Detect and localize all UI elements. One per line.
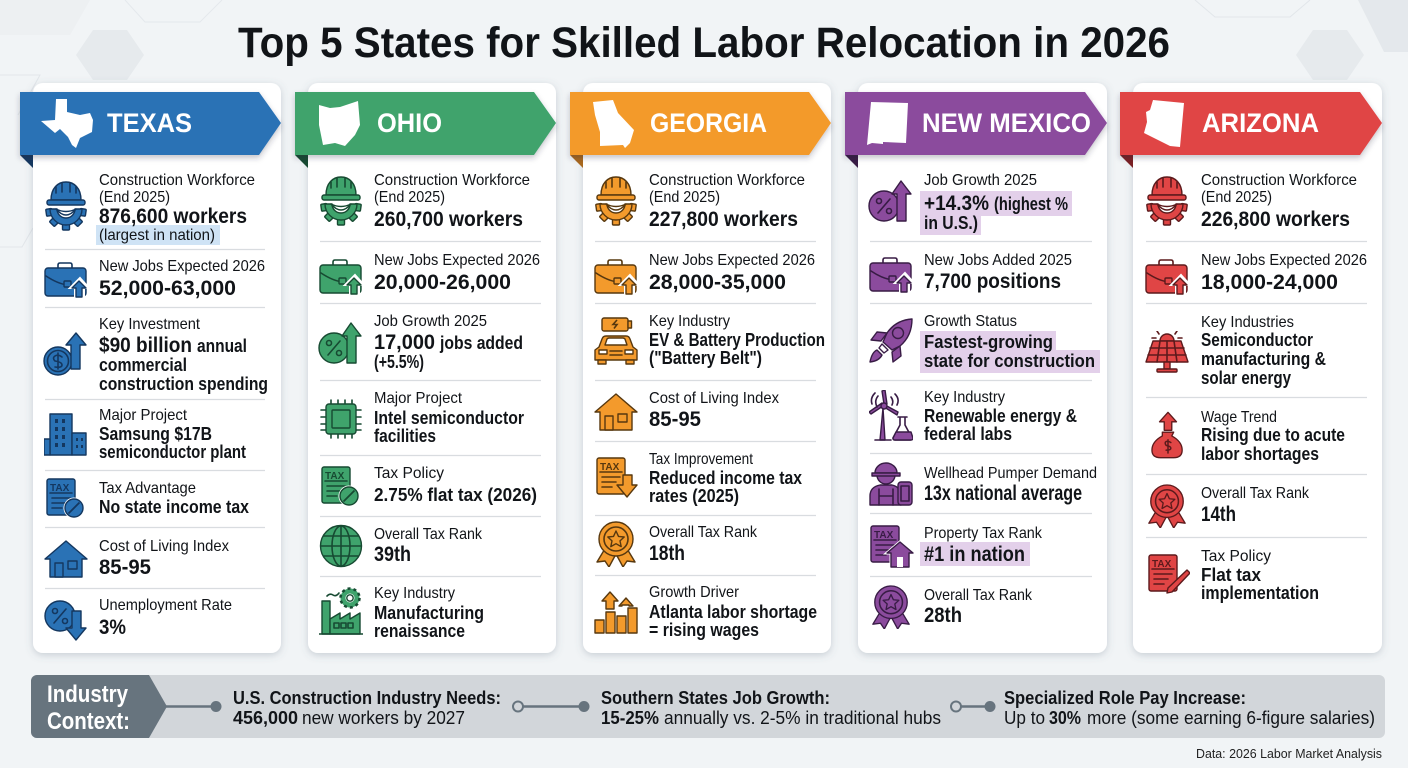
- icon: briefcase: [320, 260, 364, 295]
- row: tax policy: Tax Policy: [1201, 548, 1271, 565]
- icon: electric car and battery: [595, 318, 637, 364]
- connector 3: [951, 701, 996, 712]
- ribbon: Georgia: [570, 92, 831, 168]
- row: construction workforce: [596, 172, 805, 231]
- row: new jobs: [870, 252, 1072, 293]
- row: new jobs: [1146, 252, 1367, 295]
- row: wage trend: [1152, 409, 1345, 464]
- icon: percent with down arrow: [45, 601, 86, 640]
- row: tax improvement: [597, 451, 803, 506]
- row: growth driver: [595, 584, 817, 640]
- row: tax advantage: [47, 479, 250, 518]
- fact: construction needs: [233, 687, 501, 728]
- source note: Data: 2026 Labor Market Analysis: [1196, 746, 1382, 761]
- row: tax policy: [322, 465, 537, 506]
- row: key industries: Key Industries: [1201, 314, 1294, 331]
- fact: southern growth: Southern States Job Growth:: [601, 687, 830, 708]
- row: new jobs: New Jobs Added 2025: [924, 252, 1072, 269]
- panel: Texas: [20, 83, 281, 653]
- row: key industry: federal labs: [924, 423, 1012, 444]
- row: job growth: +14.3%: [924, 191, 989, 215]
- icon: percent with up arrow: [319, 323, 361, 363]
- row: key investment: Key Investment: [99, 316, 201, 333]
- icon: tax document with percent circle: [322, 467, 360, 506]
- icon: hard hat and gear: [596, 177, 636, 225]
- row: key industry: Key Industry: [374, 585, 455, 602]
- ribbon: Arizona: [1120, 92, 1382, 168]
- ribbon: Texas: [20, 92, 281, 168]
- fact: southern growth: annually vs. 2-5% in traditional hubs: [664, 707, 941, 728]
- row: major project: Intel semiconductor: [374, 407, 524, 428]
- row: cost of living: Cost of Living Index: [99, 538, 229, 555]
- row: new jobs: [595, 252, 815, 295]
- icon: dollar coin with arrow: [44, 333, 86, 375]
- row: unemployment: [45, 597, 232, 640]
- row: wage trend: labor shortages: [1201, 443, 1319, 464]
- row: major project: Samsung $17B: [99, 423, 212, 444]
- ribbon: Georgia: GEORGIA: [650, 108, 767, 138]
- row: tax policy: implementation: [1201, 582, 1319, 603]
- row: unemployment: 3%: [99, 615, 126, 639]
- row: tax policy: Tax Policy: [374, 465, 444, 482]
- row: new jobs: 7,700 positions: [924, 269, 1061, 293]
- row: job growth: (+5.5%): [374, 351, 424, 372]
- row: new jobs: [45, 258, 265, 300]
- row: construction workforce: Construction Workforce: [649, 172, 805, 189]
- icon: tax document with percent circle: TAX: [325, 471, 345, 482]
- row: cost of living: 85-95: [99, 555, 151, 579]
- row: construction workforce: [321, 172, 530, 231]
- row: construction workforce: Construction Workforce: [374, 172, 530, 189]
- row: wage trend: Rising due to acute: [1201, 424, 1345, 445]
- panel: Ohio: [295, 83, 556, 653]
- row: major project: Major Project: [99, 407, 188, 424]
- row: key investment: commercial: [99, 354, 187, 375]
- row: construction workforce: [46, 172, 255, 245]
- row: cost of living: [595, 390, 779, 431]
- row: job growth: [319, 313, 523, 372]
- ribbon: New Mexico: NEW MEXICO: [922, 108, 1091, 138]
- row: job growth: 17,000: [374, 330, 435, 354]
- ribbon: New Mexico: [845, 92, 1107, 168]
- row: new jobs: 52,000-63,000: [99, 276, 236, 300]
- icon: bars with arrows: [595, 592, 637, 633]
- fact: specialized pay: [1004, 687, 1375, 728]
- row: key industry: [319, 585, 484, 641]
- row: construction workforce: 876,600 workers: [99, 204, 247, 228]
- row: key industries: [1146, 314, 1326, 388]
- icon: tax document with no sign: TAX: [50, 483, 70, 494]
- footer bar: industry context: [31, 675, 1385, 738]
- row: major project: semiconductor plant: [99, 441, 246, 462]
- row: key industry: ("Battery Belt"): [649, 347, 762, 368]
- row: overall tax rank: [320, 526, 483, 566]
- ribbon: Ohio: OHIO: [377, 108, 442, 138]
- icon: house: [595, 394, 637, 430]
- icon: briefcase: [45, 263, 89, 298]
- row: growth status: state for construction: [924, 350, 1095, 371]
- icon: briefcase: [1146, 260, 1190, 295]
- row: key industry: renaissance: [374, 620, 465, 641]
- connector 1: [166, 701, 222, 712]
- row: key investment: [44, 316, 268, 394]
- row: property tax rank: [871, 525, 1043, 567]
- row: job growth: Job Growth 2025: [374, 313, 487, 330]
- row: tax policy: 2.75% flat tax (2026): [374, 484, 537, 505]
- icon: tax document with down arrow: [597, 458, 637, 497]
- row: construction workforce: (End 2025): [1201, 189, 1272, 206]
- row: key industry: EV & Battery Production: [649, 329, 825, 350]
- fact: specialized pay: more (some earning 6-figure salaries): [1087, 707, 1375, 728]
- row: wellhead pumper: 13x national average: [924, 481, 1082, 505]
- row: overall tax rank: 39th: [374, 542, 411, 566]
- row: growth driver: Growth Driver: [649, 584, 740, 601]
- row: key industry: Key Industry: [924, 389, 1005, 406]
- row: new jobs: [320, 252, 540, 295]
- row: tax improvement: Reduced income tax: [649, 467, 803, 488]
- ribbon: Arizona: ARIZONA: [1202, 108, 1319, 138]
- icon: briefcase: [595, 260, 639, 295]
- row: wage trend: Wage Trend: [1201, 409, 1277, 426]
- row: key investment: annual: [197, 335, 247, 356]
- row: key investment: construction spending: [99, 373, 268, 394]
- icon: medal: [597, 522, 635, 567]
- footer label: Context:: [47, 708, 130, 735]
- row: new jobs: New Jobs Expected 2026: [649, 252, 815, 269]
- icon: tax document with down arrow: TAX: [600, 462, 620, 473]
- icon: office buildings: [44, 414, 86, 455]
- fact: construction needs: U.S. Construction Industry Needs:: [233, 687, 501, 708]
- icon: tax document with no sign: [47, 479, 84, 518]
- icon: tax document with house: [871, 526, 913, 567]
- row: major project: [321, 390, 524, 446]
- row: tax improvement: rates (2025): [649, 485, 739, 506]
- connector 2: [513, 701, 590, 712]
- background hexagon pattern: [0, 0, 1408, 247]
- icon: money bag with arrow: [1152, 412, 1182, 458]
- row: new jobs: New Jobs Expected 2026: [374, 252, 540, 269]
- icon: percent with up arrow: [869, 181, 911, 221]
- icon: medal: [1149, 485, 1185, 528]
- row: construction workforce: (End 2025): [374, 189, 445, 206]
- row: growth driver: Atlanta labor shortage: [649, 601, 817, 622]
- row: property tax rank: #1 in nation: [924, 542, 1025, 566]
- row: construction workforce: 260,700 workers: [374, 207, 523, 231]
- icon: hard hat and gear: [46, 182, 86, 230]
- icon: solar panel and sun: [1146, 327, 1188, 372]
- row: tax advantage: No state income tax: [99, 496, 250, 517]
- row: new jobs: 18,000-24,000: [1201, 270, 1338, 294]
- panel: Georgia: [570, 83, 831, 653]
- row: construction workforce: 226,800 workers: [1201, 207, 1350, 231]
- row: construction workforce: [1147, 172, 1357, 231]
- fact: construction needs: 456,000: [233, 707, 298, 728]
- row: cost of living: 85-95: [649, 407, 701, 431]
- row: new jobs: 20,000-26,000: [374, 270, 511, 294]
- icon: hard hat and gear: [321, 177, 361, 225]
- row: job growth: (highest %: [994, 193, 1068, 214]
- title: Top 5 States for Skilled Labor Relocation in 2026: [238, 19, 1170, 67]
- row: major project: Major Project: [374, 390, 463, 407]
- row: construction workforce: 227,800 workers: [649, 207, 798, 231]
- row: overall tax rank: Overall Tax Rank: [374, 526, 483, 543]
- icon: hard hat and gear: [1147, 177, 1187, 225]
- row: overall tax rank: [597, 522, 758, 567]
- row: construction workforce: Construction Workforce: [1201, 172, 1357, 189]
- row: construction workforce: (End 2025): [99, 189, 170, 206]
- fact: specialized pay: Specialized Role Pay Increase:: [1004, 687, 1246, 708]
- row: key industry: [595, 313, 825, 368]
- row: new jobs: New Jobs Expected 2026: [99, 258, 265, 275]
- icon: house: [45, 541, 87, 577]
- row: property tax rank: Property Tax Rank: [924, 525, 1043, 542]
- icon: tax document with pen: TAX: [1152, 559, 1172, 570]
- row: key industries: solar energy: [1201, 367, 1292, 388]
- row: key industries: Semiconductor: [1201, 329, 1313, 350]
- row: job growth: in U.S.): [924, 212, 978, 233]
- fact: specialized pay: Up to: [1004, 707, 1045, 728]
- row: construction workforce: (End 2025): [649, 189, 720, 206]
- row: tax advantage: Tax Advantage: [99, 480, 196, 497]
- row: growth driver: = rising wages: [649, 619, 759, 640]
- row: tax improvement: Tax Improvement: [649, 451, 753, 468]
- row: wellhead pumper: Wellhead Pumper Demand: [924, 465, 1097, 482]
- icon: tax document with house: TAX: [874, 530, 894, 541]
- row: wellhead pumper: [870, 463, 1097, 505]
- fact: specialized pay: 30%: [1049, 707, 1081, 728]
- row: growth status: Fastest-growing: [924, 331, 1053, 352]
- fact: southern growth: 15-25%: [601, 707, 659, 728]
- row: growth status: [870, 313, 1100, 373]
- icon: medal: [873, 586, 909, 629]
- icon: briefcase: [870, 258, 914, 293]
- row: overall tax rank: [873, 586, 1033, 629]
- icon: wind turbine and flask: [869, 390, 913, 440]
- row: new jobs: 28,000-35,000: [649, 270, 786, 294]
- row: growth status: Growth Status: [924, 313, 1017, 330]
- row: overall tax rank: [1149, 485, 1310, 528]
- row: major project: facilities: [374, 425, 436, 446]
- row: key industry: Manufacturing: [374, 602, 484, 623]
- row: unemployment: Unemployment Rate: [99, 597, 232, 614]
- row: tax policy: Flat tax: [1201, 564, 1262, 585]
- fact: construction needs: new workers by 2027: [302, 707, 465, 728]
- row: key industry: Key Industry: [649, 313, 730, 330]
- row: construction workforce: Construction Workforce: [99, 172, 255, 189]
- row: new jobs: New Jobs Expected 2026: [1201, 252, 1367, 269]
- row: key industry: [869, 389, 1077, 444]
- row: cost of living: [45, 538, 229, 579]
- icon: microchip: [321, 400, 361, 438]
- ribbon: Ohio: [295, 92, 556, 168]
- row: job growth: jobs added: [439, 332, 523, 353]
- icon: rocket: [870, 319, 912, 362]
- fact: southern growth: [601, 687, 941, 728]
- row: cost of living: Cost of Living Index: [649, 390, 779, 407]
- footer label: [31, 675, 167, 738]
- row: overall tax rank: Overall Tax Rank: [924, 587, 1033, 604]
- panel: Arizona: [1120, 83, 1382, 653]
- row: job growth: [869, 172, 1072, 235]
- row: major project: [44, 407, 246, 462]
- icon: worker: [870, 463, 912, 505]
- row: construction workforce: (largest in nation): [99, 227, 215, 244]
- row: job growth: Job Growth 2025: [924, 172, 1037, 189]
- row: key industry: Renewable energy &: [924, 405, 1077, 426]
- icon: factory with gear: [319, 588, 363, 634]
- footer label: Industry: [47, 681, 129, 708]
- row: overall tax rank: 18th: [649, 541, 685, 565]
- row: key industries: manufacturing &: [1201, 348, 1326, 369]
- ribbon: Texas: TEXAS: [107, 108, 192, 138]
- row: key investment: $90 billion: [99, 333, 192, 357]
- icon: globe: [320, 526, 362, 566]
- row: overall tax rank: 14th: [1201, 502, 1236, 526]
- row: tax policy: [1149, 548, 1319, 603]
- row: overall tax rank: Overall Tax Rank: [649, 524, 758, 541]
- icon: tax document with pen: [1149, 555, 1190, 593]
- row: overall tax rank: 28th: [924, 603, 962, 627]
- row: overall tax rank: Overall Tax Rank: [1201, 485, 1310, 502]
- panel: New Mexico: [845, 83, 1107, 653]
